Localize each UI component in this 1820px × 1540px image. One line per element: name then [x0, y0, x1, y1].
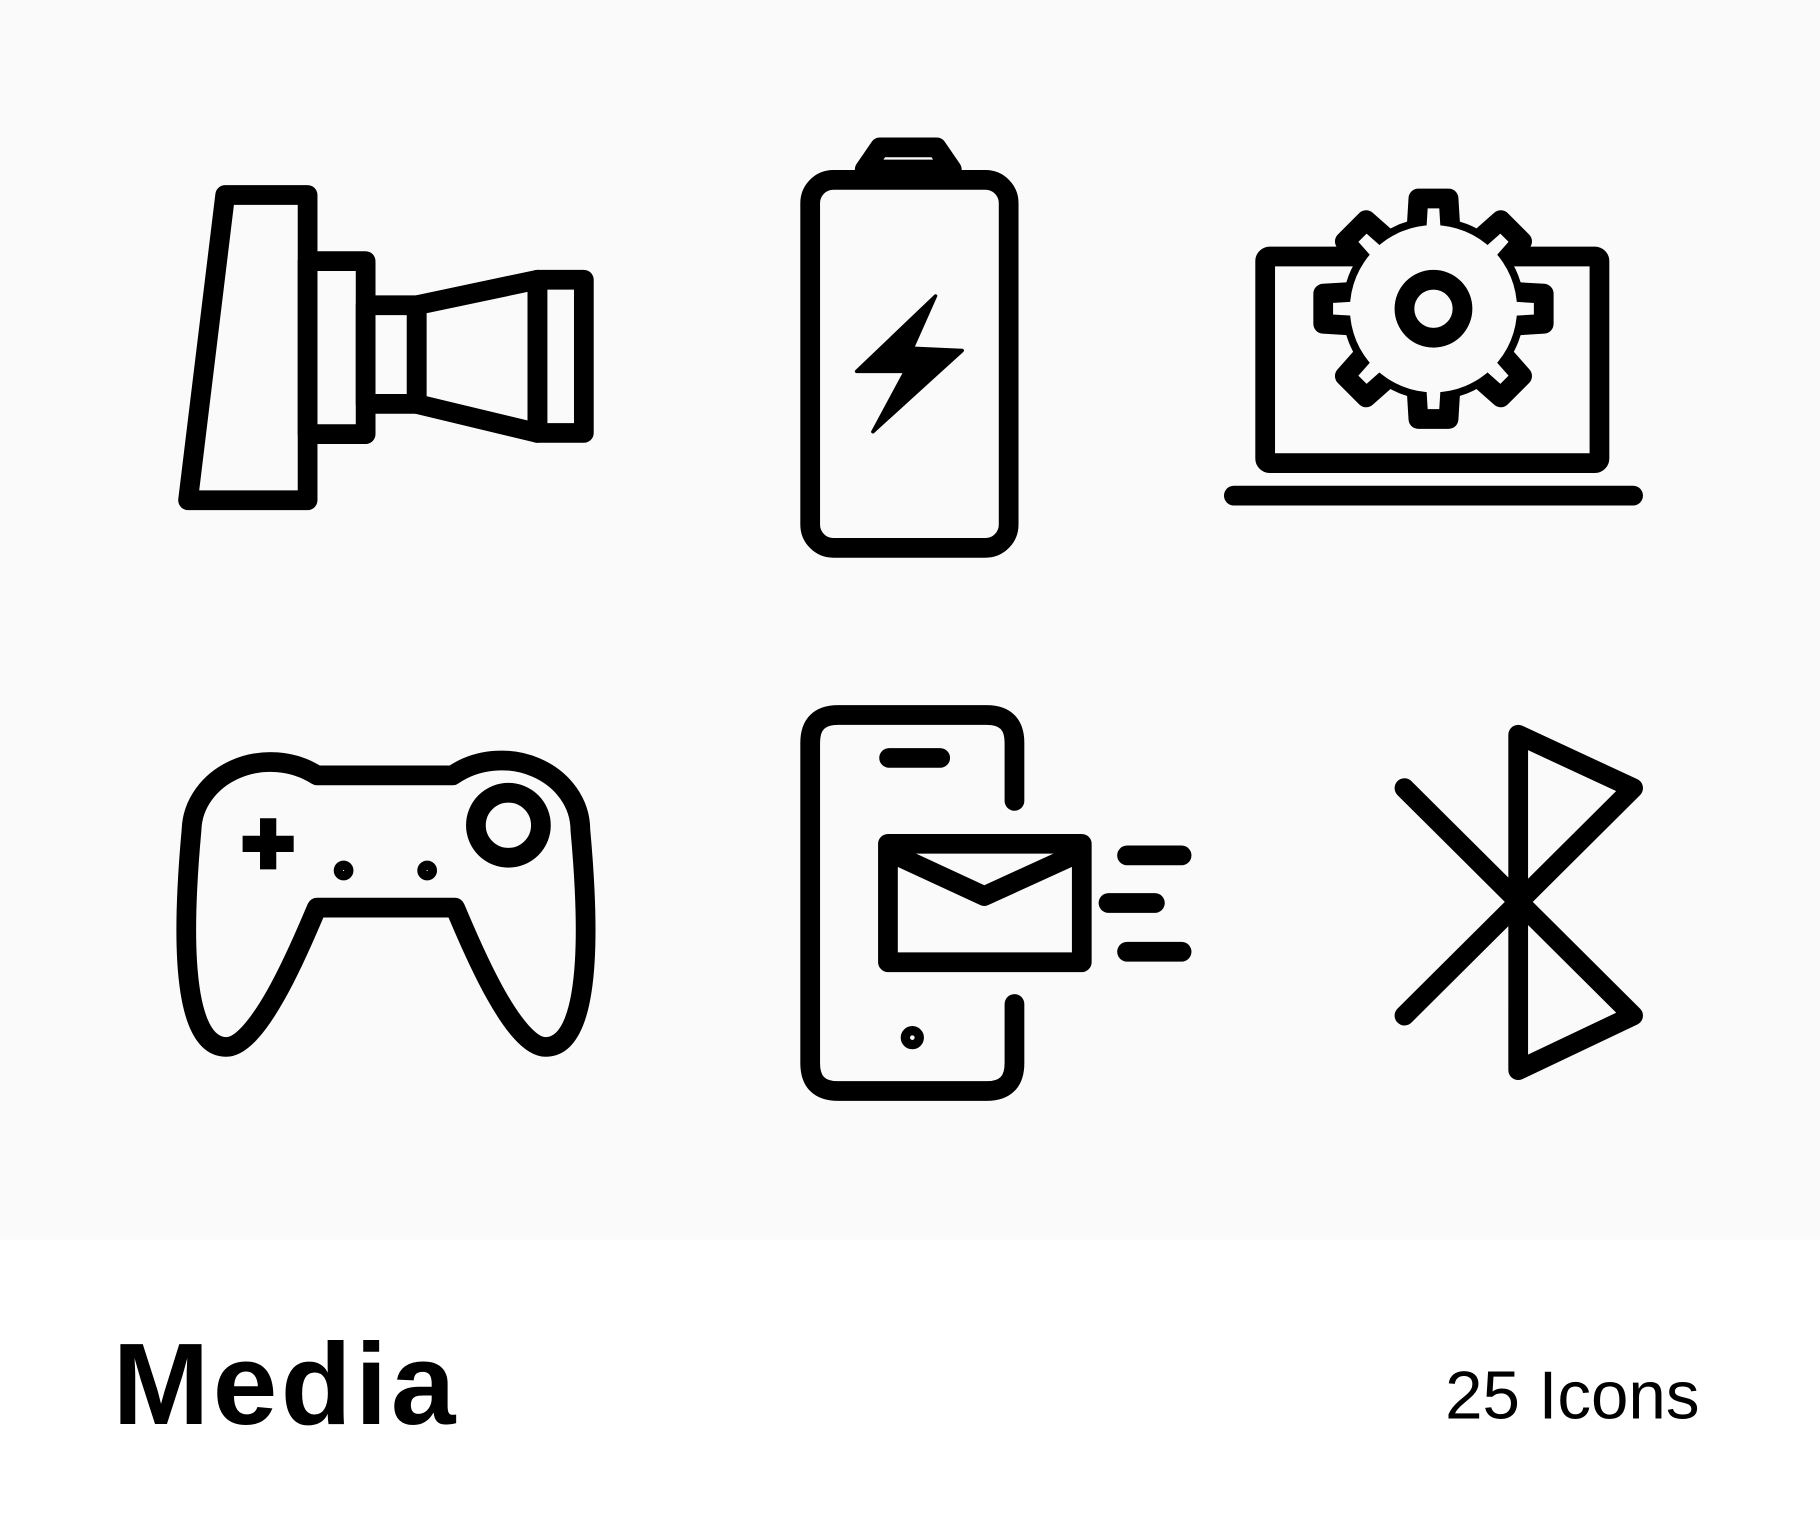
icon: telescope: [188, 195, 584, 500]
title: Media: [113, 1319, 459, 1449]
icon: phone mail: [810, 715, 1182, 1091]
icon count: 25 Icons: [1445, 1358, 1699, 1433]
icon: battery: [810, 147, 1009, 548]
icon: bluetooth: [1404, 735, 1633, 1070]
icon: gamepad: [186, 760, 586, 1047]
icon: laptop settings: [1234, 198, 1633, 496]
